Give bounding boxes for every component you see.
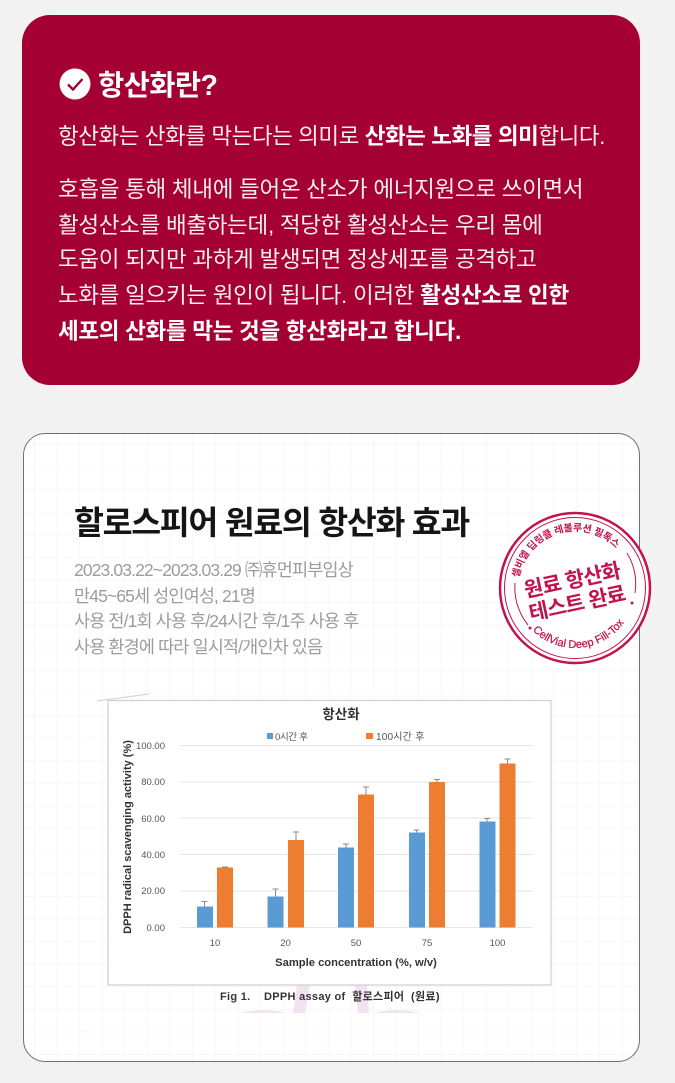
- chart y axis title: DPPH radical scavenging activity (%): [122, 740, 134, 934]
- text block: explanation: 호흡을 통해 체내에 들어온 산소가 에너지원으로 쓰이면서: [58, 177, 583, 202]
- chart legend: [267, 731, 424, 743]
- text block: explanation: [58, 177, 583, 344]
- chart x axis labels: 75: [422, 938, 432, 949]
- text block: test details: [74, 560, 358, 657]
- chart: DPPH antioxidant bar chart: 100.00: [136, 741, 165, 752]
- text block: test details: 만45~65세 성인여성, 21명: [74, 586, 255, 606]
- panel: test result card: [23, 433, 640, 1062]
- text block: explanation: 세포의 산화를 막는 것을 항산화라고 합니다.: [58, 319, 461, 344]
- chart x axis title: Sample concentration (%, w/v): [275, 957, 437, 969]
- stamp: raw material antioxidant test complete: 테스트 완료: [527, 582, 628, 625]
- chart title: 항산화: [322, 707, 360, 722]
- text block: test details: 사용 전/1회 사용 후/24시간 후/1주 사용 후: [74, 611, 358, 631]
- heading: card title: 할로스피어 원료의 항산화 효과: [74, 505, 469, 541]
- chart bars: 0 hours: [197, 822, 496, 928]
- text block: explanation: 도움이 되지만 과하게 발생되면 정상세포를 공격하고: [58, 247, 537, 272]
- stamp: raw material antioxidant test complete: CellVial Deep Fill-Tox: [534, 619, 624, 649]
- heading: what is antioxidation: 항산화란?: [98, 70, 217, 102]
- chart x axis labels: 50: [351, 938, 361, 949]
- chart gridlines and y axis labels: [180, 746, 533, 928]
- chart x axis labels: [210, 938, 505, 949]
- chart legend: 100시간 후: [376, 731, 424, 743]
- chart: DPPH antioxidant bar chart: 20.00: [141, 886, 165, 897]
- text: definition: 항산화는 산화를 막는다는 의미로 산화는 노화를 의미합니다.: [58, 124, 605, 149]
- stamp: raw material antioxidant test complete: 원료 항산화: [522, 559, 623, 602]
- chart: DPPH antioxidant bar chart: 40.00: [141, 850, 165, 861]
- panel: what is antioxidation: [22, 15, 640, 385]
- chart x axis labels: 20: [280, 938, 291, 949]
- chart x axis labels: 10: [210, 938, 220, 949]
- chart x axis labels: 100: [490, 938, 505, 949]
- chart legend: 0시간 후: [275, 732, 308, 743]
- stamp: raw material antioxidant test complete: 셀비엘 딥링클 레볼루션 필톡스: [512, 522, 618, 576]
- stamp: raw material antioxidant test complete: [498, 512, 652, 664]
- caption: figure 1: Fig 1. DPPH assay of 할로스피어 (원료): [220, 991, 440, 1003]
- text block: test details: 2023.03.22~2023.03.29 ㈜휴먼피부임상: [74, 560, 353, 580]
- decoration: pink watermark behind caption: [240, 986, 420, 1013]
- chart: DPPH antioxidant bar chart: 0.00: [146, 923, 165, 934]
- chart: DPPH antioxidant bar chart: 80.00: [141, 777, 165, 788]
- chart error bars: [202, 759, 510, 906]
- text block: test details: 사용 환경에 따라 일시적/개인차 있음: [74, 637, 322, 657]
- chart: DPPH antioxidant bar chart: 60.00: [141, 814, 165, 825]
- text block: explanation: 노화를 일으키는 원인이 됩니다. 이러한 활성산소로 인한: [58, 283, 569, 308]
- chart bars: 100 hours: [217, 764, 516, 928]
- icon: check circle: [60, 68, 90, 100]
- chart: DPPH antioxidant bar chart: [97, 694, 552, 986]
- text block: explanation: 활성산소를 배출하는데, 적당한 활성산소는 우리 몸에: [58, 213, 543, 238]
